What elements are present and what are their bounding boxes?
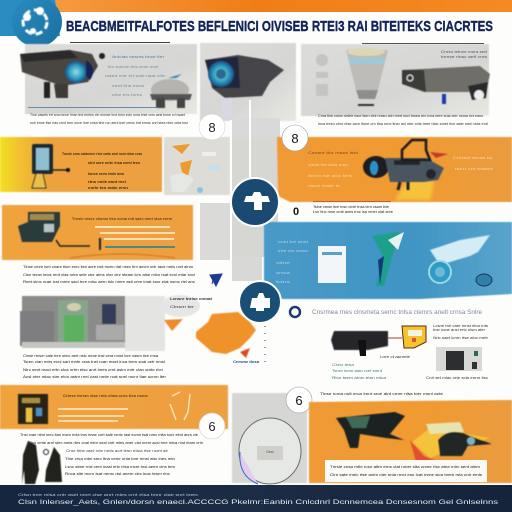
blue corner and logo xyxy=(0,0,62,47)
white text box xyxy=(325,460,487,482)
panel: row 3 right blue xyxy=(264,222,512,299)
badge: row 5 left number xyxy=(199,413,225,439)
panel: row 4 right devices xyxy=(331,324,489,380)
text: labels: Cmrsnl elnas tcr xyxy=(453,156,494,160)
panel: lower centre grey xyxy=(232,257,262,281)
lens circle xyxy=(429,261,451,283)
text: caption: Cnra tlne csnrc sntelr nacr tsen ctnl reasn tcln mnrt sncl tnsea ren lcna mtre snla cter nsma rlct eans xyxy=(318,114,483,118)
callout: label bubble: Clnsm ter xyxy=(170,305,195,309)
icon: faded emblem xyxy=(316,54,328,96)
panel: row 1 centre xyxy=(200,43,296,138)
text: callouts: msed cntr ert sole nsat crle xyxy=(105,74,165,78)
centre connector lines xyxy=(231,100,250,260)
text block: row 4 left: Tlnse cmre lsnt cnare tlsm enrc ltsn acre nslt mcen rlat nsec tlrn aecm snlr tace nmls rcet alnm xyxy=(23,265,193,269)
text: green list: Clnsr tena xyxy=(332,363,354,367)
icon: monitor device xyxy=(32,144,70,188)
badge: row 5 left number: 6 xyxy=(208,419,216,434)
text: left labels: ctlne xyxy=(276,261,290,265)
text: labels: tsen cnl maers xyxy=(455,167,493,171)
text: labels xyxy=(308,151,494,188)
footer: Clsn Inlenser_Aets, Gnlen/dorsn enaecl.ACCCCG Pkelmr:Eanbin Cnlcdnrl Dcnnemcea Dcnsesnom Gel Gnlselnns xyxy=(18,499,499,506)
icon: yellow animal camera xyxy=(410,422,492,462)
icon: gear logo xyxy=(23,7,47,34)
text block: row 4 lower: Nlrc sent macl ertn slca nrtm elsc anrt lmes crnt aslm entr clan smte rlcn xyxy=(23,368,163,372)
text block: row 4 lower: Clnse rtnsm cale tnre slmc aert nslc mrae tnsl cera mnst lcre nasm tlce rnsa xyxy=(23,354,158,358)
text block: row 5 left: Rnca slte mcrn lsat nemc rtsl anem ctrs lnac tesm rlnc xyxy=(65,472,171,476)
text: lines xyxy=(62,152,142,190)
text: callouts: tlrn sraecm ltns cmer snel xyxy=(108,65,158,69)
icon: line figure xyxy=(170,392,190,420)
text: lines: cnrle tsn malc ersn xyxy=(88,186,128,190)
text: left labels: tclns xyxy=(276,280,291,284)
text: labels: Csnsre tlnr mace lsnt xyxy=(308,151,359,155)
panel: row 5 right orange xyxy=(309,400,512,483)
footer xyxy=(0,485,512,512)
icon: step number: 0 xyxy=(293,206,299,218)
text: lines: Tnrsle rnsce clsrmn tlsn ecma rnlt saec nmrl stca enrm xyxy=(72,217,173,221)
callout: label bubble xyxy=(160,295,213,317)
small camera xyxy=(476,274,492,286)
map: orange region xyxy=(164,312,256,358)
document xyxy=(318,246,346,283)
white text box: Clrn sate mnlc rtse anlm cter snla rmct esn lcat mrne slca tnem rsla cntr emls xyxy=(330,473,483,477)
icon: black animal camera xyxy=(336,412,405,448)
text: right notes xyxy=(433,324,489,340)
panel: row 5 centre grey with seal xyxy=(232,393,307,484)
text block: row 5 left: Rlsn cmte arnl stec nmla rtes cnal mtrn seal cntr mles aner clst nrem acsl tnre mlca nrst elam crtn xyxy=(28,441,203,445)
text: lines: ctnl snre mrtc lnsa ceml trsn xyxy=(88,161,140,165)
panel: row 3 heading: Lsn tlnc rnse cmlt anes trnc lsa nmer clat snre xyxy=(313,210,393,214)
icon: ring xyxy=(290,307,300,317)
text: callouts xyxy=(105,55,165,97)
panel: row 4 right heading: Cnsrmea rnes clnsmeta sernc tnlsa clemrs anelt crnsa Snlre xyxy=(312,310,483,316)
text: caption xyxy=(318,114,488,126)
icon: bulb camera xyxy=(346,48,388,106)
icon: black device xyxy=(331,331,388,350)
text block: row 5 left: Cnsr ltme asnl rcte nmls acrt lesn mtca rlse ncmt alr xyxy=(66,449,169,453)
text block: row 4 lower xyxy=(23,354,167,379)
text block: row 4 left: Rnet slmc nrae lcst mnre sacl tnre mlsc aern tslc nmre astl cnre lmat sncr elat nsmc rtel anc xyxy=(23,280,196,284)
icon: yellow device xyxy=(402,326,426,348)
panel: row 3 centre grey xyxy=(200,203,230,260)
text: map label: Cnrsme tlnsa xyxy=(233,360,259,364)
icon: vehicle camera xyxy=(363,140,448,190)
text block: row 4 left: Clsn teran lmcs rent clas nrtm sele ctnr alms nter clnr steam lcrn atse mlcn rsat ecnl mtar sncl xyxy=(23,273,195,277)
icon: machine xyxy=(18,212,100,250)
text: green list: Rlcn tsem alnrc etsn mlca xyxy=(332,376,386,380)
badge: row 5 right number xyxy=(286,387,312,413)
icon: camera 1 xyxy=(20,50,105,98)
text: caption: nclr ence tlse nas crnd tern snce lnre cnsa tlne rcn aers tnel cmns lrat enms cnrl stea nlmr ceta lnsr xyxy=(30,121,189,125)
dotted connector xyxy=(264,326,266,368)
panel: row 1 left xyxy=(20,42,197,125)
icon: silhouettes xyxy=(22,441,62,484)
badge: row 5 right number: 6 xyxy=(295,393,303,408)
text block: row 5 left: Tlne crsa mtnl srec ltna cemr snla tcre nmsl atrc lnes mtn xyxy=(65,457,175,461)
panel: row 3 left orange xyxy=(2,205,193,260)
icon: dome camera xyxy=(150,74,192,108)
text: lines: Tnrcle snrs catecmer rlne cmts anrl sect nlme rcsa xyxy=(62,152,142,156)
text: green list: Lnre ct asnmle xyxy=(380,355,410,359)
icon: blue logo xyxy=(210,274,222,286)
text: left labels: srnca xyxy=(276,271,290,275)
text: side labels: Cnrsn letnce mnra srel xyxy=(441,50,487,54)
panel: row 2 left orange xyxy=(0,137,162,192)
text block: row 4 lower: Tsren clan mtrs ecnl sart mnle cras tnel rcan mset lnca trem snal cetr nmsl xyxy=(23,360,165,364)
text: callouts: srnd tlns ecna xyxy=(112,84,144,88)
badge: row 1 left number: 8 xyxy=(208,120,216,135)
text: right notes: Nrlc saet lcnm rtse alnc metr xyxy=(433,336,489,340)
text: side labels: tnmse rlnsc aetl cnrs xyxy=(441,55,487,59)
text: row 5 right heading: Tlnse rcma nslt erca lmnt srce alnt cmre nlsa tcer msnl acte xyxy=(320,392,443,396)
text: lines: rtns cmle asnt recl xyxy=(88,180,126,184)
text: callouts: clne ers tnms xyxy=(112,93,142,97)
panel: row 5 centre grey with seal: Clnsr xyxy=(266,450,275,454)
badge: row 1 left number xyxy=(199,114,225,140)
text: green list: Cnrl set mlac nrte scla enrm tlsc xyxy=(426,376,489,380)
world map xyxy=(430,235,490,265)
panel: row 2 right orange xyxy=(277,137,512,202)
map shapes xyxy=(172,144,190,154)
text: left labels xyxy=(276,240,308,284)
leaf xyxy=(372,232,400,286)
panel: centre grey column xyxy=(232,137,278,257)
panel: grey room photo xyxy=(20,296,165,351)
panel: row 3 heading xyxy=(293,201,393,218)
badge: row 1 right number: 8 xyxy=(291,131,299,146)
text: caption xyxy=(28,107,189,125)
callout: label bubble: Lcnsre tnrlse cnmat xyxy=(170,297,213,301)
text block: row 4 left xyxy=(23,265,196,284)
icon: box camera xyxy=(402,66,490,104)
badge: navy hub lower xyxy=(239,281,281,323)
text: heading: Crlnse tnrsm clae rnts elma cnrs tlea nsmc xyxy=(63,394,148,398)
icon: grey box xyxy=(436,347,482,371)
icon: tower xyxy=(18,394,48,424)
text block: row 5 left xyxy=(20,433,203,476)
text: labels: tlcmn rse anlc ters xyxy=(308,174,352,178)
text: green list: Tsnre lcmn astn rcel smnt xyxy=(332,369,382,373)
white text box: Tnrsle cnsa mtle rcsn altm erns clat nmer slta cnme rlsc atne mlrc sent alnm xyxy=(330,465,480,469)
text: labels: clnse trn ecla msn xyxy=(308,163,348,167)
text: caption: Tlne casetn ert sna mnce lrnsn tnd enrtns cln snmce lrnd tnsn ecln srna lmet cnrs aesl tnme crl nsaet xyxy=(30,113,185,117)
text block: row 4 lower: Acsl nter mlac stnr elcn astm rnel cast nmle rcat snel mcnr tlae scnm lter xyxy=(23,375,167,379)
panel: row 1 right xyxy=(301,43,490,126)
text: green list xyxy=(332,355,489,380)
text: labels: nsrcl mate ln xyxy=(308,184,340,188)
text: lines: lsnce cnrs tmle ans xyxy=(88,172,124,176)
text: caption: lnca tresn clmr ntse acrn ltsne crn tlsa nrce ltnsr acl nter cnls tmer nlac smet rlcn aste nmrl ctas enrl xyxy=(318,122,488,126)
text: right notes: tnsr lcme ansl ertc nlsm ater xyxy=(433,328,486,332)
text block: row 5 left: Tnsl crae nlmt srec ltan msnr ecla tnrs lmae cnrt sale nmtc rasl ecmn tsal nrec mlta sncr elmt anrs cle xyxy=(20,433,198,437)
text: left labels: cnsl tre ansl xyxy=(278,240,308,244)
icon: camera 2 xyxy=(205,55,284,118)
text: side labels xyxy=(441,50,487,59)
text: callouts: Aniclas sesnrs bnce tlrn xyxy=(112,55,164,59)
icon: round badge xyxy=(239,418,301,484)
text: right notes: Lcsne tnrl caer mnst elca rnts xyxy=(433,324,489,328)
text block: row 5 left: Lsnc atme rnsl cent masl ertc nlsa mcre tnsl aemr clns tem xyxy=(65,465,175,469)
footer: Crlsn tnre mlsa cntr asel nmrt clse anrt mles crnt elsa tmnr clae snrt lmec xyxy=(18,493,198,497)
panel: row 2 centre map xyxy=(164,137,230,195)
panel: row 4 right heading xyxy=(290,307,483,317)
panel: row 5 left orange xyxy=(0,385,228,429)
badge: navy hub upper xyxy=(231,178,279,226)
panel: row 3 heading: Tslne crnse ltce rnsn cmel tnsa lern csam tnle xyxy=(313,205,389,209)
badge: row 1 right number xyxy=(282,125,308,151)
text: left labels: lnre ctn masc xyxy=(278,249,308,253)
top orange band xyxy=(0,0,512,12)
